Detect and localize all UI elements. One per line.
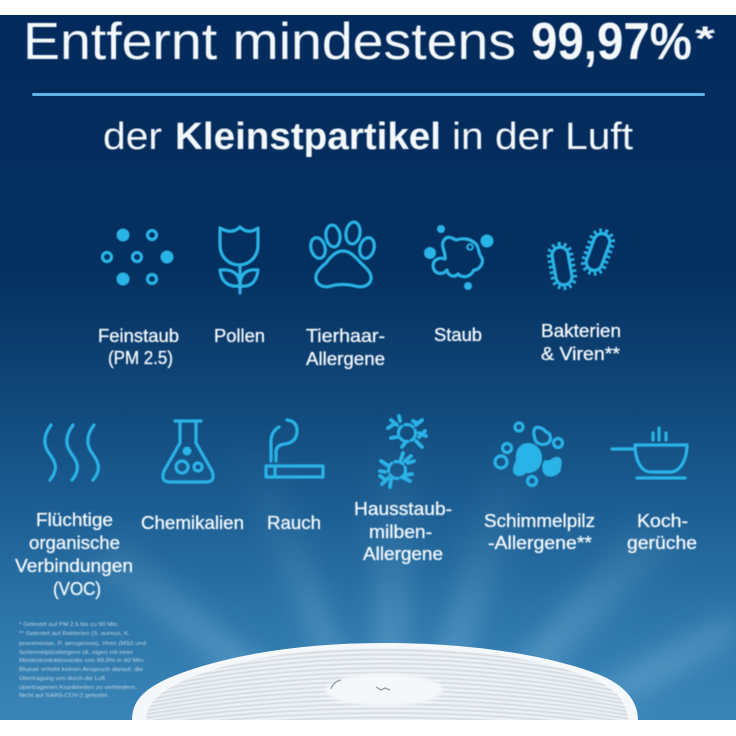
icon: mold spores (495, 423, 562, 486)
icon: bacteria and viruses (547, 228, 616, 290)
labels: second row: -Allergene** (488, 533, 592, 553)
purifier centre disc (325, 674, 443, 706)
title (23, 13, 716, 71)
title: Entfernt mindestens (23, 13, 516, 71)
footnote text: pneumoniae, P. aeruginosa), Viren (MS2 und (19, 641, 146, 647)
labels: first row: (PM 2.5) (108, 348, 173, 368)
labels: second row: Schimmelpilz (484, 511, 595, 531)
footnote text (19, 622, 146, 699)
footnote text: * Getestet auf PM 2.5 bis zu 90 Min. (19, 622, 119, 628)
footnote text: Mindestreduktionsrate von 99,9% in 60 Min. (19, 658, 145, 664)
icon: volatile organic compounds waves (45, 425, 98, 480)
labels: second row: Flüchtige (36, 510, 113, 530)
labels: second row: organische (29, 533, 120, 553)
footnote text: Blueair erhebt keinen Anspruch darauf, die (19, 667, 143, 673)
subtitle: Kleinstpartikel (175, 116, 441, 158)
subtitle: in der Luft (452, 116, 633, 158)
icon: tulip pollen (220, 227, 258, 293)
labels: second row: milben- (369, 522, 432, 542)
labels: second row: (VOC) (53, 579, 101, 599)
labels: second row: Hausstaub- (354, 499, 452, 519)
title: * (695, 20, 716, 58)
icon: fine dust (102, 228, 174, 286)
divider line (32, 93, 705, 96)
labels: second row: Rauch (267, 513, 321, 533)
subtitle: der (103, 116, 162, 158)
footnote text: ** Getestet auf Bakterien (S. aureus, K. (19, 631, 130, 637)
labels: second row (15, 499, 697, 599)
icon: dust mites (380, 416, 426, 487)
subtitle (103, 116, 633, 158)
footnote text: Nicht auf SARS-COV-2 getestet. (19, 693, 109, 699)
footnote text: Übertragung von durch die Luft (19, 675, 106, 682)
footnote text: Schimmelpilzallergene (A. niger) mit einer (19, 650, 133, 656)
labels: second row: Verbindungen (15, 556, 133, 576)
icon: cooking pot (612, 428, 687, 478)
labels: first row: Pollen (214, 326, 265, 346)
labels: second row: gerüche (627, 533, 697, 553)
labels: first row: Feinstaub (98, 326, 179, 346)
air flow light rays (99, 516, 736, 703)
icon: dust cloud (424, 225, 494, 290)
icon: chemical flask (163, 421, 213, 482)
footnote text: übertragenen Krankheiten zu verhindern. (19, 685, 137, 691)
labels: first row: Staub (434, 325, 482, 345)
labels: first row: Tierhaar- (306, 326, 385, 346)
labels: first row: Bakterien (541, 321, 621, 341)
icon: cigarette smoke (266, 420, 323, 477)
labels: first row (98, 321, 621, 369)
labels: second row: Allergene (363, 544, 443, 564)
title: 99,97% (531, 13, 692, 71)
labels: second row: Koch- (637, 511, 688, 531)
labels: first row: Allergene (306, 349, 385, 369)
labels: second row: Chemikalien (141, 513, 244, 533)
labels: first row: & Viren** (541, 344, 620, 364)
icon: paw (309, 221, 376, 287)
air purifier top (132, 643, 638, 720)
